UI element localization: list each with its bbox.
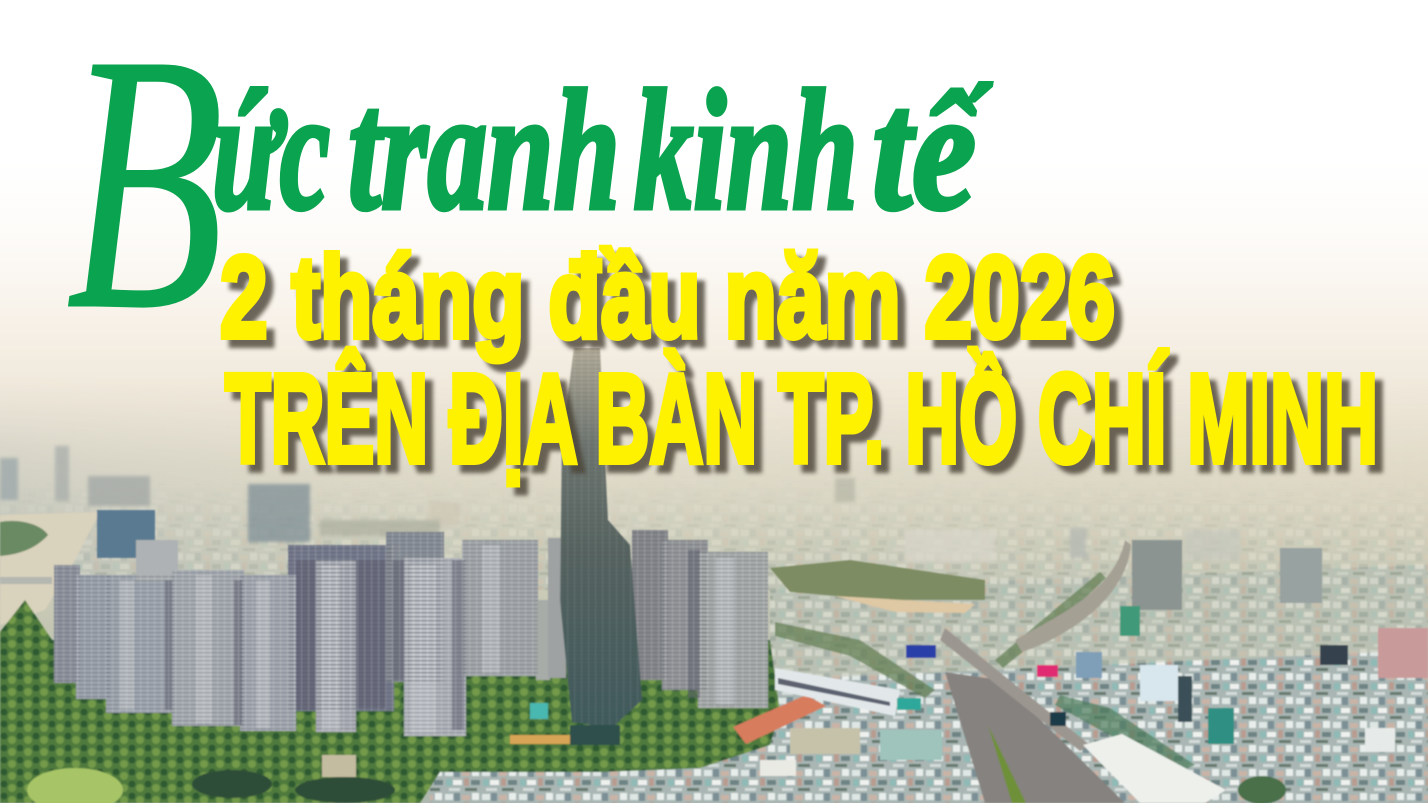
residential towers (54, 530, 768, 736)
canal (835, 596, 975, 613)
tree strips (775, 572, 1195, 772)
white roof station (1083, 734, 1226, 803)
city photograph (0, 348, 1428, 803)
foreground greenery (0, 600, 780, 803)
highway (940, 540, 1131, 803)
podium and pool (510, 703, 620, 745)
word: tranh: tranh (348, 56, 620, 246)
golf lawn (27, 768, 123, 803)
word: tế: tế (872, 56, 992, 246)
distant skyline (0, 446, 1240, 562)
colourful right buildings (1076, 628, 1428, 803)
far blue tower (97, 510, 155, 558)
subtitle yellow lines (220, 232, 1386, 497)
line 1 shadow: 2 tháng đầu năm 2026 (228, 240, 1123, 370)
left river bank (0, 521, 48, 556)
tower highlights (120, 545, 734, 733)
park ponds (192, 755, 395, 803)
landmark tower (560, 348, 642, 728)
park middle (770, 560, 985, 600)
urban fabric right (430, 565, 1428, 803)
right towers (1120, 540, 1322, 636)
river bridge (0, 577, 52, 584)
horizon tint (0, 426, 174, 538)
far city texture (76, 512, 1428, 590)
title script line (66, 0, 992, 386)
tower shadows (165, 550, 700, 730)
line 1: 2 tháng đầu năm 2026 (220, 232, 1115, 362)
lower middle buildings (733, 668, 942, 776)
word: kinh: kinh (634, 56, 858, 246)
billboards (897, 645, 1066, 726)
river (0, 512, 100, 625)
urban fade (770, 565, 1428, 680)
word: ức: ức (212, 56, 330, 246)
